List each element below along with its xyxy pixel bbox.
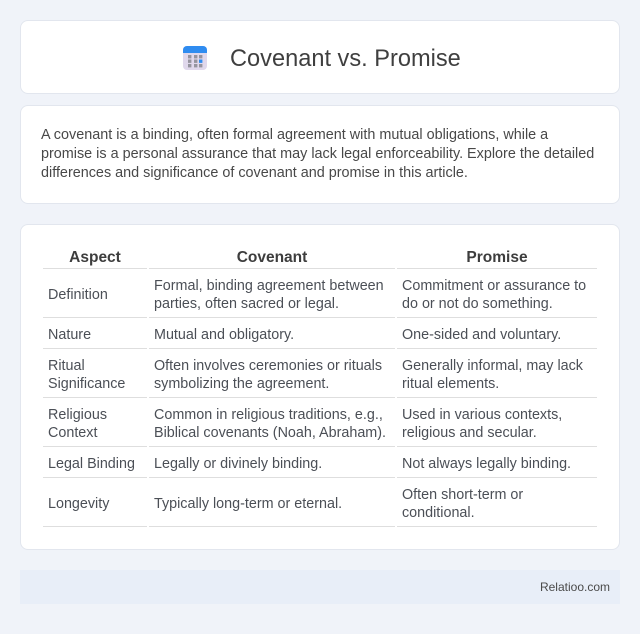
row: Ritual Significance: Ritual <box>48 358 85 374</box>
row: Definition: Formal, binding agreement between <box>154 278 384 294</box>
footer bar <box>20 570 620 604</box>
row: Definition <box>48 278 586 312</box>
heading: Promise: Promise <box>466 249 528 266</box>
icon: calendar <box>183 46 207 70</box>
row: Definition: Commitment or assurance to <box>402 278 586 294</box>
row: Legal Binding: Legally or divinely binding. <box>154 456 322 472</box>
row: Longevity: conditional. <box>402 505 475 521</box>
text block: intro: A covenant is a binding, often formal agreement with mutual obligations, while a <box>41 127 548 143</box>
row: Longevity: Longevity <box>48 496 109 512</box>
row: Longevity <box>48 487 523 521</box>
row: Definition: do or not do something. <box>402 296 553 312</box>
panel: comparison table <box>20 224 620 550</box>
row: Ritual Significance <box>48 358 583 392</box>
row: Religious Context: Used in various contexts, <box>402 407 562 423</box>
row: Religious Context: Common in religious traditions, e.g., <box>154 407 383 423</box>
row: Religious Context: religious and secular. <box>402 425 537 441</box>
row: Ritual Significance: Often involves ceremonies or rituals <box>154 358 382 374</box>
panel: intro <box>20 105 620 204</box>
text block: intro: promise is a personal assurance that may lack legal enforceability. Explore the detailed <box>41 146 594 162</box>
row: Longevity: Often short-term or <box>402 487 523 503</box>
row: Nature: One-sided and voluntary. <box>402 327 561 343</box>
panel: title card <box>20 20 620 94</box>
footer credit: Relatioo.com <box>540 580 610 594</box>
row: Legal Binding: Not always legally binding. <box>402 456 571 472</box>
row: Nature: Mutual and obligatory. <box>154 327 294 343</box>
row: Religious Context <box>48 407 562 441</box>
row: Ritual Significance: ritual elements. <box>402 376 499 392</box>
heading: Covenant: Covenant <box>237 249 307 266</box>
row: Legal Binding: Legal Binding <box>48 456 135 472</box>
heading: Aspect: Aspect <box>69 249 121 266</box>
row: Religious Context: Context <box>48 425 97 441</box>
row: Religious Context: Biblical covenants (Noah, Abraham). <box>154 425 386 441</box>
row: Definition: parties, often sacred or legal. <box>154 296 339 312</box>
text block: intro: differences and significance of covenant and promise in this article. <box>41 165 468 181</box>
row: Nature <box>48 327 561 343</box>
text block: intro <box>41 127 594 181</box>
row: Longevity: Typically long-term or eternal. <box>154 496 342 512</box>
row: Religious Context: Religious <box>48 407 107 423</box>
row: Ritual Significance: symbolizing the agreement. <box>154 376 329 392</box>
row: Legal Binding <box>48 456 571 472</box>
row: Definition: Definition <box>48 287 108 303</box>
row: Ritual Significance: Generally informal, may lack <box>402 358 583 374</box>
title: Covenant vs. Promise <box>230 46 461 72</box>
row: Ritual Significance: Significance <box>48 376 125 392</box>
row: Nature: Nature <box>48 327 91 343</box>
